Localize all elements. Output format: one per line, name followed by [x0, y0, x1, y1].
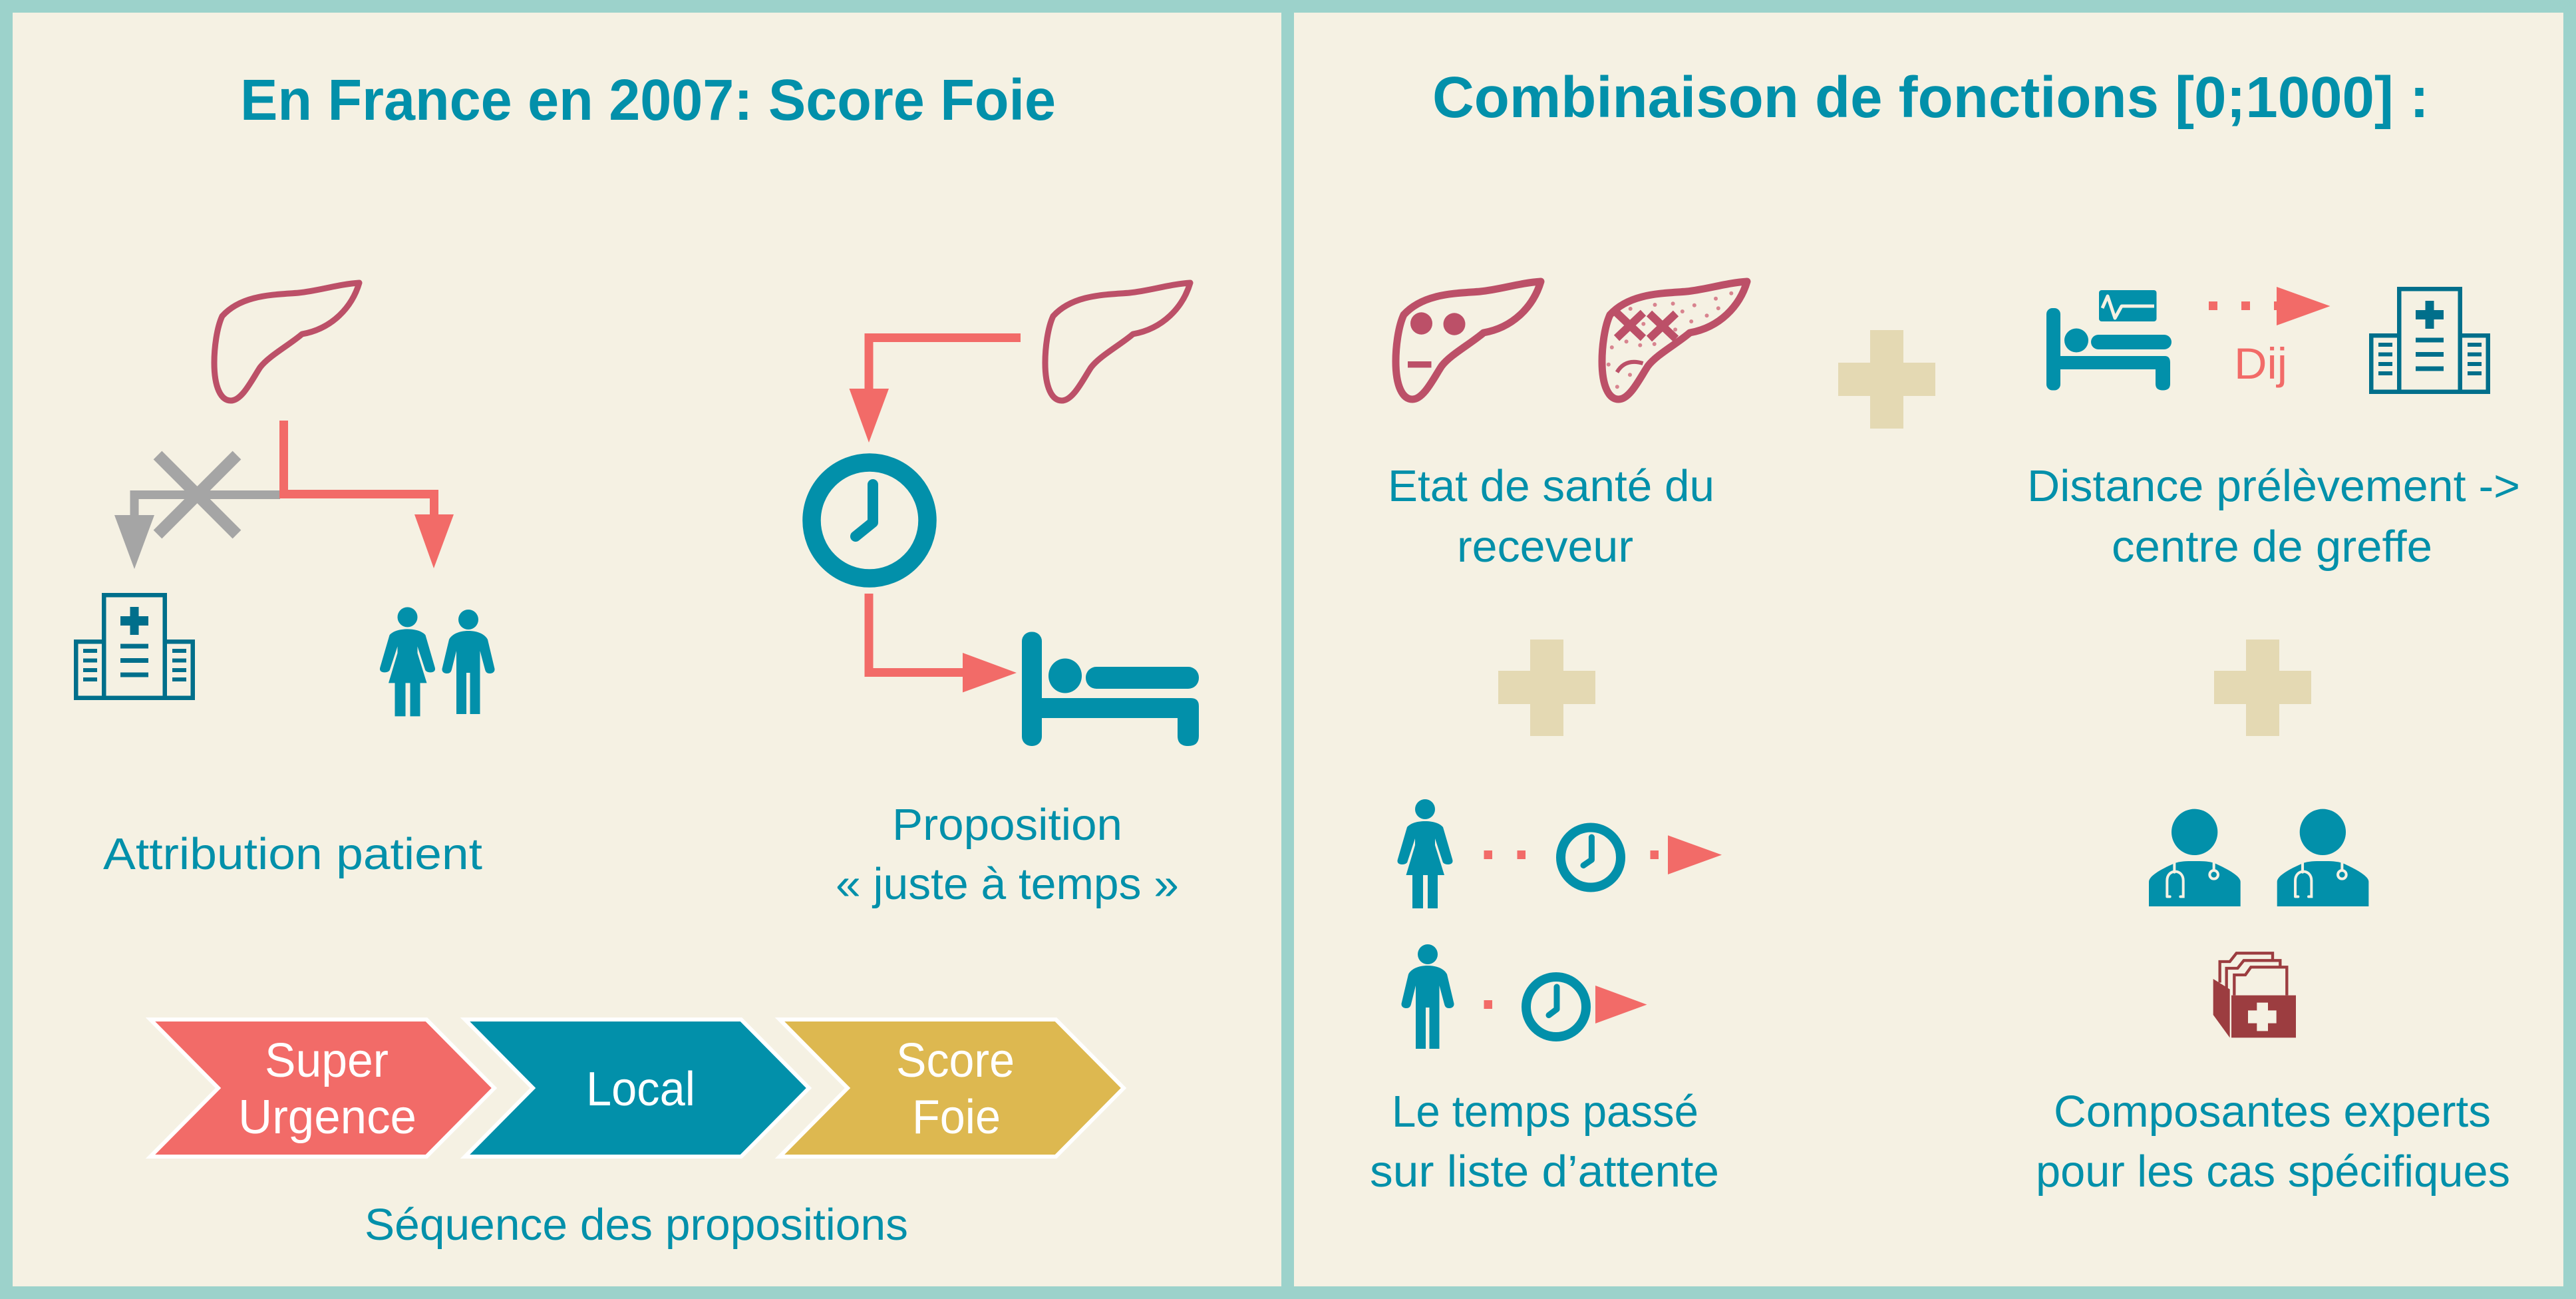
- icon: liver: [214, 283, 359, 401]
- icon: doctor left: [2149, 809, 2241, 906]
- label: Proposition juste a temps: Proposition: [892, 800, 1122, 850]
- chevron: Score Foie: Score: [896, 1034, 1015, 1087]
- label: Attribution patient: Attribution patient: [103, 829, 482, 879]
- arrow: grey crossed-out branch: [114, 455, 280, 569]
- icon: woman: [1397, 799, 1453, 908]
- chevrons: sequence: [150, 1020, 1124, 1157]
- label: Distance prelevement: centre de greffe: [2112, 522, 2432, 572]
- label: Etat de sante du receveur: Etat de santé du: [1388, 461, 1714, 511]
- title: En France en 2007: Score Foie: En France en 2007: Score Foie: [240, 68, 1056, 132]
- icon: sick liver: [1602, 281, 1747, 399]
- icon: bed: [1022, 632, 1199, 746]
- icon: man: [1401, 944, 1454, 1049]
- icon: liver: [1045, 283, 1190, 401]
- label: Proposition juste a temps: « juste à temps »: [836, 859, 1179, 909]
- label: Etat de sante du receveur: receveur: [1457, 522, 1633, 572]
- icon: clock: [812, 463, 927, 578]
- panel: Combinaison de fonctions: [1294, 13, 2563, 1286]
- chevron: Local: Local: [586, 1063, 695, 1116]
- icon: healthy liver: [1396, 281, 1541, 399]
- title: Combinaison de fonctions: Combinaison de fonctions [0;1000] :: [1432, 65, 2429, 130]
- icon: plus left: [1498, 640, 1595, 736]
- label: Etat de sante du receveur: [1388, 461, 1714, 572]
- label: Distance prelevement: Distance prélèvement ->: [2027, 461, 2520, 511]
- chevron: Super Urgence: [150, 1020, 494, 1157]
- label: Le temps passe: sur liste d’attente: [1370, 1147, 1719, 1197]
- icon: hospital: [76, 595, 193, 698]
- diagram: attribution patient: [76, 283, 495, 716]
- label: Composantes experts: Composantes experts: [2054, 1087, 2491, 1137]
- icon: doctor right: [2277, 809, 2368, 906]
- chevron: Score Foie: Foie: [912, 1091, 1001, 1144]
- arrow: long wait: [1484, 835, 1722, 874]
- chevron: Score Foie: [780, 1020, 1124, 1157]
- chevron: Super Urgence: Urgence: [238, 1091, 416, 1144]
- diagram: proposition juste a temps: [812, 283, 1199, 746]
- icon: bed with monitor: [2046, 290, 2172, 390]
- arrow: clock to bed: [869, 594, 1017, 692]
- label: Le temps passe: Le temps passé: [1392, 1087, 1698, 1137]
- label: Proposition juste a temps: [836, 800, 1179, 909]
- label: Distance prelevement: [2027, 461, 2520, 572]
- icon: clock: [1526, 977, 1586, 1037]
- waiting time: man row: [1401, 944, 1647, 1049]
- arrow: liver to clock: [849, 338, 1021, 443]
- label: Sequence des propositions: Séquence des propositions: [365, 1200, 908, 1250]
- icon: plus top: [1838, 330, 1935, 429]
- arrow: red branch to patients: [283, 421, 454, 568]
- icon: plus right: [2214, 640, 2311, 736]
- arrow: distance: [2209, 287, 2330, 325]
- waiting time: woman row: [1397, 799, 1722, 908]
- label: Composantes experts: [2036, 1087, 2510, 1197]
- chevron: Local: [465, 1020, 809, 1157]
- label: Composantes experts: pour les cas spécifiques: [2036, 1147, 2510, 1197]
- chevron: Super Urgence: Super: [265, 1034, 389, 1087]
- label: Le temps passe: [1370, 1087, 1719, 1197]
- icon: hospital: [2371, 289, 2488, 392]
- arrow: short wait: [1484, 986, 1647, 1023]
- label: Dij: Dij: [2234, 339, 2287, 388]
- icon: woman and man: [380, 607, 495, 716]
- icon: clock: [1561, 828, 1621, 888]
- panel: En France en 2007: [13, 13, 1281, 1286]
- icon: medical folder: [2213, 953, 2296, 1037]
